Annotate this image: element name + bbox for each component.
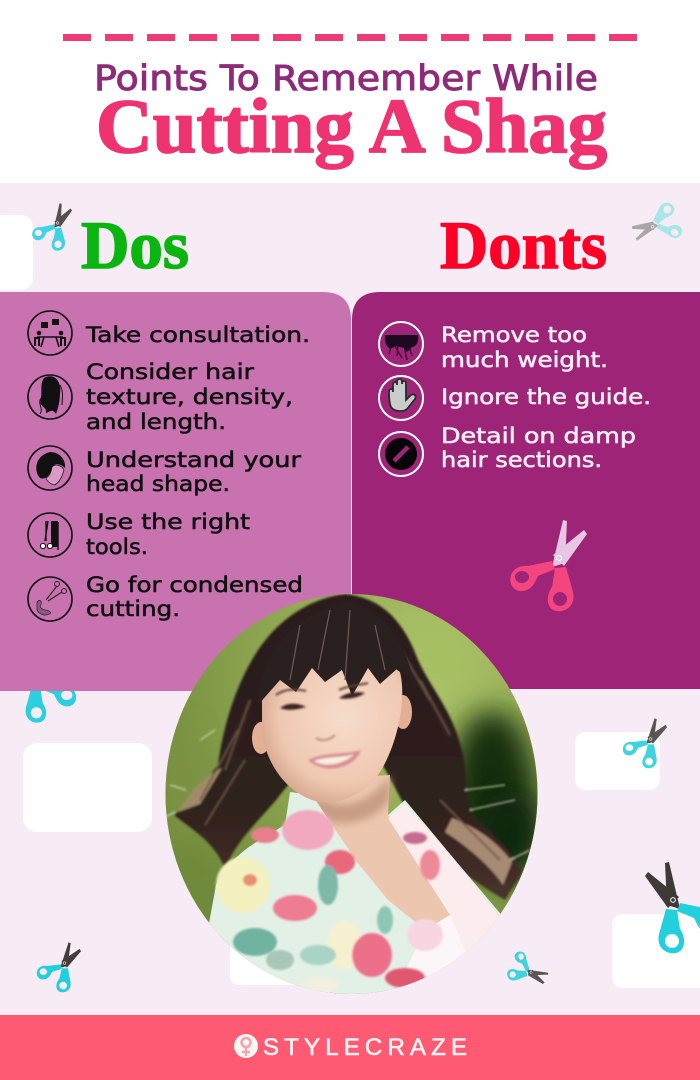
icon: hair weight bbox=[379, 322, 423, 366]
face bbox=[262, 656, 402, 803]
title bbox=[63, 38, 637, 169]
photo: smiling woman with shag haircut bbox=[160, 590, 545, 1000]
title: Points To Remember While bbox=[94, 59, 598, 99]
icon: scissors bottom left bbox=[35, 940, 82, 994]
bangs bbox=[262, 639, 411, 700]
shirt bbox=[209, 792, 500, 994]
text: go for condensed: Go for condensed bbox=[86, 573, 303, 597]
icon: hand bbox=[379, 376, 423, 420]
eyes brows nose mouth bbox=[276, 683, 368, 769]
icon: scissors bottom centre bbox=[505, 949, 549, 987]
text: texture density: texture, density, bbox=[86, 385, 293, 409]
text: take consultation: Take consultation. bbox=[85, 323, 310, 347]
icon: large scissors right bbox=[645, 862, 700, 953]
icon: condensed cutting bbox=[28, 577, 72, 621]
logo: stylecraze mark bbox=[234, 1034, 258, 1058]
icon: tools bbox=[28, 513, 72, 557]
text: remove too: Remove too bbox=[441, 323, 587, 347]
neck bbox=[316, 775, 450, 924]
icon: hair texture bbox=[28, 375, 72, 419]
text: hair sections: hair sections. bbox=[441, 448, 602, 472]
icon: head shape bbox=[28, 446, 72, 490]
hair back bbox=[160, 594, 530, 900]
text: understand your: Understand your bbox=[86, 448, 301, 472]
text: use the right: Use the right bbox=[86, 510, 250, 534]
icon: scissors partly behind panel bbox=[15, 650, 76, 723]
icon: consultation bbox=[28, 311, 72, 355]
heading: dos: Dos bbox=[81, 207, 189, 283]
text: cutting: cutting. bbox=[86, 597, 180, 621]
text: tools: tools. bbox=[86, 535, 148, 559]
heading: donts: Donts bbox=[440, 207, 607, 283]
icon: scissors right upper bbox=[621, 716, 668, 770]
text: head shape: head shape. bbox=[86, 472, 230, 496]
text: consider hair: Consider hair bbox=[86, 360, 254, 384]
panel: dos bbox=[0, 292, 351, 691]
icon: pink scissors bbox=[510, 520, 587, 611]
text: much weight: much weight. bbox=[441, 348, 608, 372]
text: ignore the guide: Ignore the guide. bbox=[441, 385, 651, 409]
icon: no symbol bbox=[379, 432, 423, 476]
panel: donts bbox=[352, 292, 700, 689]
footer bar bbox=[0, 1015, 700, 1080]
title: Cutting A Shag bbox=[96, 83, 607, 169]
text: and length: and length. bbox=[86, 410, 226, 434]
icon: pale scissors top right bbox=[627, 195, 692, 260]
ears bbox=[252, 722, 266, 754]
text: detail on damp: Detail on damp bbox=[441, 424, 636, 448]
logo: stylecraze wordmark: STYLECRAZE bbox=[263, 1034, 467, 1061]
icon: scissors top left bbox=[32, 203, 72, 251]
